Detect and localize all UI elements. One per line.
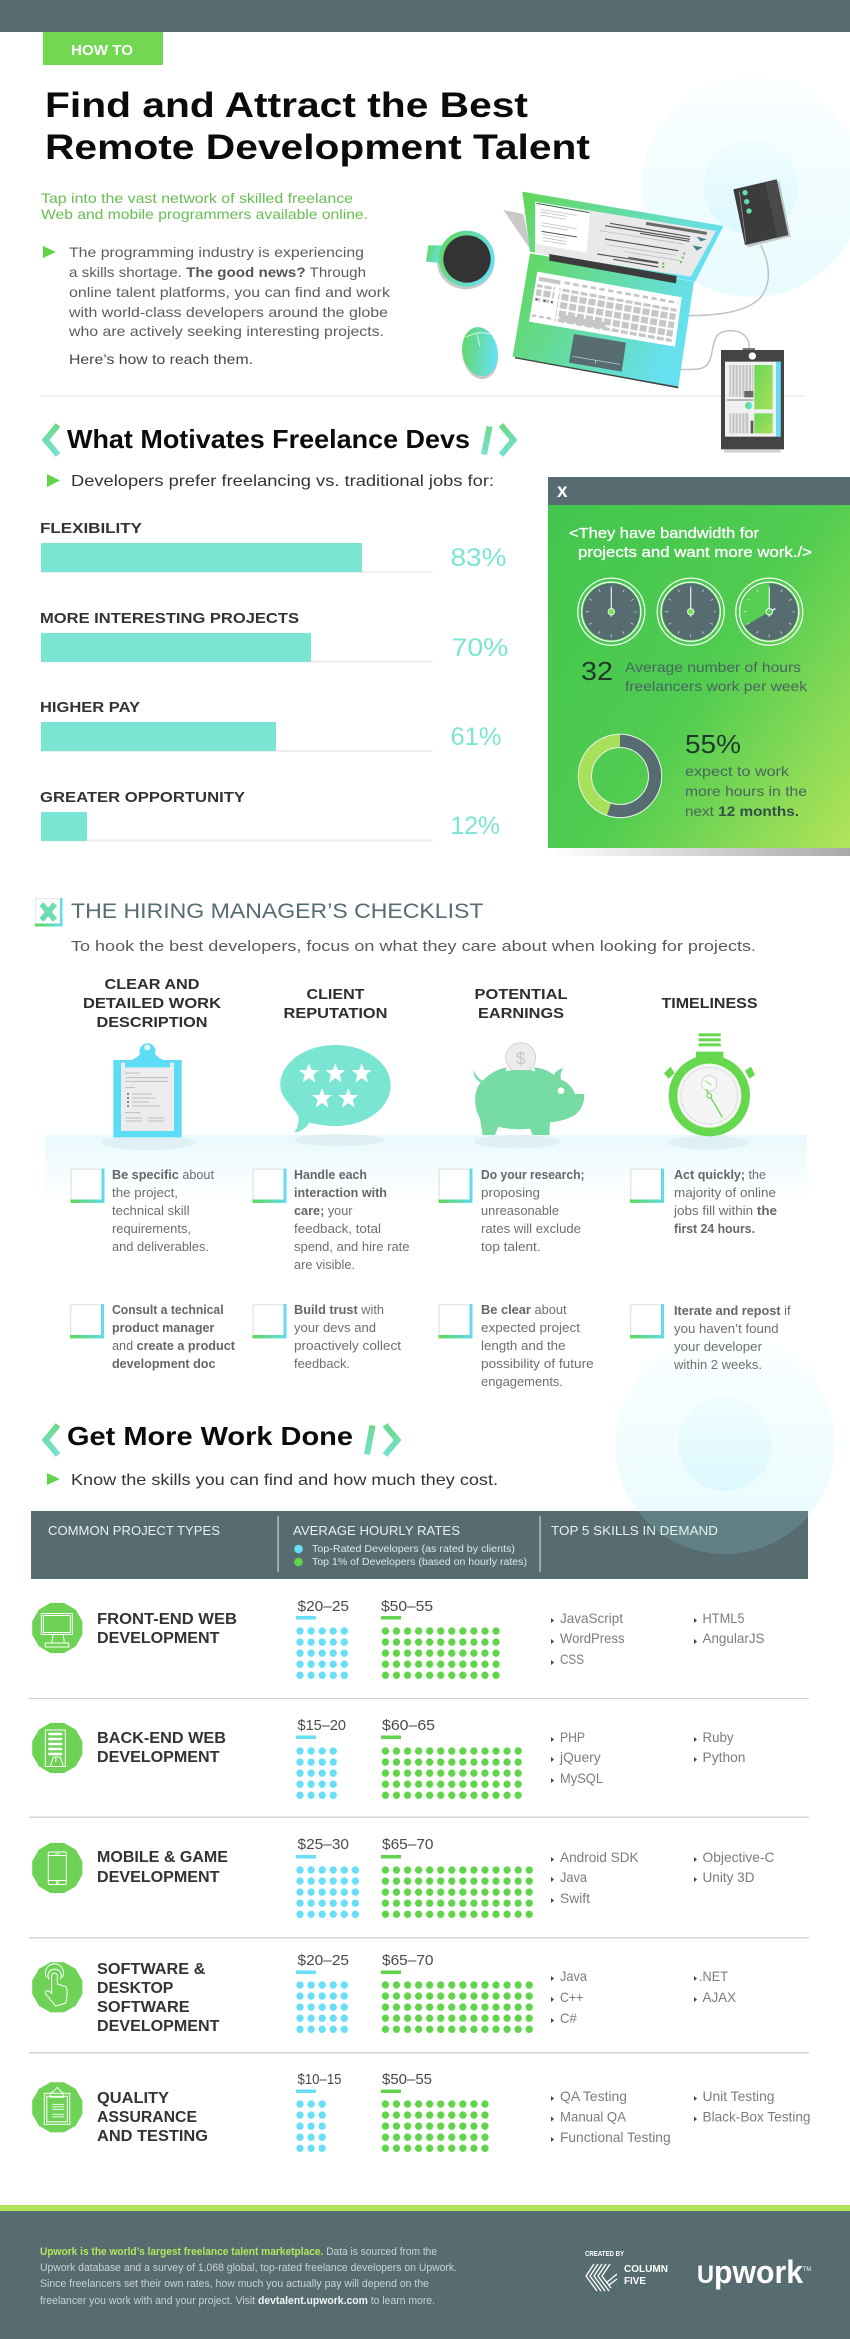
checklist item 5: consult a technical product manager: development doc: [112, 1356, 216, 1371]
skills: CSS: [560, 1651, 584, 1667]
skills: Ruby: [702, 1729, 734, 1745]
stat: 32 hours: 32: [581, 656, 613, 686]
icon: server: [32, 1723, 82, 1773]
logo: upwork: Upwork: [697, 2254, 803, 2290]
checklist item 8: iterate and repost: Iterate and repost if: [674, 1303, 791, 1318]
checklist item 1: be specific: technical skill: [112, 1203, 190, 1218]
row: mobile and game development: DEVELOPMENT: [97, 1869, 220, 1886]
bar: more interesting projects 70%: MORE INTERESTING PROJECTS: [40, 610, 299, 627]
checklist item 2: handle each interaction: feedback, total: [294, 1221, 381, 1236]
icon: touch hand: [32, 1962, 82, 2012]
logo: column five: [585, 2251, 668, 2291]
skills: [551, 1610, 764, 1667]
checklist item 1: be specific: the project,: [112, 1185, 178, 1200]
logo: column five: COLUMN: [624, 2263, 668, 2275]
column headings: DETAILED WORK: [83, 995, 221, 1012]
legend: Top 1% of Developers (based on hourly rates): [312, 1556, 527, 1568]
panel heading: <They have bandwidth for: [569, 526, 759, 542]
skills: Android SDK: [560, 1849, 639, 1865]
decorative circle lower right: [615, 1334, 835, 1554]
table header: AVERAGE HOURLY RATES: [293, 1523, 460, 1538]
row: software and desktop software development: SOFTWARE &: [97, 1961, 205, 1978]
column headings: [83, 976, 758, 1031]
checklist item 7: be clear: [438, 1302, 594, 1389]
footer text: [40, 2246, 457, 2307]
laptop base: [513, 253, 694, 388]
rates: $25–30: [298, 1836, 349, 1853]
bar: greater opportunity 12%: GREATER OPPORTUNITY: [40, 789, 245, 806]
icon: monitor: [32, 1603, 82, 1653]
rates: [294, 1952, 535, 2035]
row: software and desktop software development: [32, 1952, 737, 2035]
footer: [0, 2205, 850, 2339]
icon: piggy bank with coin: [474, 1043, 584, 1148]
checklist item 1: be specific: requirements,: [112, 1221, 191, 1236]
checklist band background: [45, 1135, 807, 1205]
checklist intro: To hook the best developers, focus on what they care about when looking for projects.: [71, 938, 756, 955]
footer text: Upwork is the world’s largest freelance talent marketplace. Data is sourced from the: [40, 2246, 437, 2258]
skills: [551, 2088, 810, 2145]
checklist item 6: build trust: your devs and: [294, 1320, 376, 1335]
skills: PHP: [560, 1729, 585, 1745]
rates: $50–55: [381, 1598, 433, 1615]
router: [733, 179, 791, 247]
heading: what motivates freelance devs: What Motivates Freelance Devs: [67, 424, 470, 454]
rates: $10–15: [298, 2071, 342, 2088]
checklist item 5: consult a technical product manager: and create a product: [112, 1338, 236, 1353]
checklist item 3: do your research: rates will exclude: [481, 1221, 581, 1236]
checklist item 5: consult a technical product manager: product manager: [112, 1320, 214, 1335]
illustration: laptop, mug, mouse, router, phone: [426, 179, 791, 453]
heading: the hiring manager's checklist: [35, 898, 484, 926]
row: front-end web development: [32, 1598, 764, 1681]
panel heading: projects and want more work./>: [578, 545, 812, 561]
cable: router to laptop: [688, 245, 768, 316]
footer text: freelancer you work with and your project. Visit devtalent.upwork.com to learn more.: [40, 2295, 435, 2307]
row: front-end web development: FRONT-END WEB: [97, 1611, 237, 1628]
icon: stopwatch: [664, 1033, 755, 1149]
skills: WordPress: [560, 1630, 624, 1646]
table header: TOP 5 SKILLS IN DEMAND: [551, 1523, 718, 1538]
panel heading: [569, 526, 812, 561]
skills: QA Testing: [560, 2088, 627, 2104]
skills: Unity 3D: [702, 1869, 754, 1885]
row: software and desktop software development: SOFTWARE: [97, 1999, 190, 2016]
intro paragraph: The programming industry is experiencing: [69, 244, 364, 260]
checklist item 8: iterate and repost: you haven’t found: [674, 1321, 779, 1336]
row: software and desktop software development: DESKTOP: [97, 1980, 173, 1997]
checklist item 2: handle each interaction: Handle each: [294, 1167, 367, 1182]
row: quality assurance and testing: AND TESTING: [97, 2128, 208, 2145]
bar chart: reasons for freelancing: [40, 520, 508, 842]
skills: Java: [560, 1869, 587, 1885]
subheading with arrow: Developers prefer freelancing vs. traditional jobs for:: [71, 473, 494, 490]
heading: get more work done: Get More Work Done: [67, 1421, 353, 1451]
green intro text: Tap into the vast network of skilled freelance: [41, 190, 353, 206]
rates: [294, 1717, 524, 1801]
bar: higher pay 61%: [40, 699, 502, 752]
stat: 32 hours: Average number of hours: [625, 659, 801, 675]
skills: AngularJS: [702, 1630, 764, 1646]
phone: [721, 348, 784, 453]
skills: [551, 1968, 737, 2026]
checklist item 4: act quickly: first 24 hours.: [674, 1221, 755, 1236]
legend: [294, 1543, 527, 1568]
icon: clipboard: [32, 2082, 82, 2132]
heading: the hiring manager's checklist: THE HIRING MANAGER’S CHECKLIST: [71, 900, 484, 923]
icon: arrow: [43, 246, 56, 258]
footer text: Upwork database and a survey of 1,068 global, top-rated freelance developers on Upwork.: [40, 2262, 457, 2274]
checklist item 2: handle each interaction: spend, and hire rate: [294, 1239, 410, 1254]
table header: [31, 1511, 808, 1579]
skills: Black-Box Testing: [702, 2108, 810, 2124]
checklist item 1: be specific: Be specific about: [112, 1167, 214, 1182]
row: mobile and game development: MOBILE & GAME: [97, 1849, 228, 1866]
checklist item 6: build trust: proactively collect: [294, 1338, 401, 1353]
skills: Functional Testing: [560, 2129, 671, 2145]
checklist item 6: build trust: [252, 1302, 401, 1371]
checklist item 7: be clear: length and the: [481, 1338, 566, 1353]
intro paragraph: Here’s how to reach them.: [69, 351, 253, 367]
skills: Objective-C: [702, 1849, 774, 1865]
row: software and desktop software development: DEVELOPMENT: [97, 2018, 220, 2035]
how to tag: [43, 32, 163, 65]
logo: upwork: TM: [803, 2267, 811, 2273]
checklist item 3: do your research: proposing: [481, 1185, 540, 1200]
checklist item 2: handle each interaction: are visible.: [294, 1257, 355, 1272]
stat: 32 hours: [581, 656, 808, 694]
skills: AJAX: [702, 1989, 737, 2005]
checklist item 2: handle each interaction: care; your: [294, 1203, 353, 1218]
clock icons: [578, 578, 803, 645]
title: [45, 85, 590, 167]
skills: Java: [560, 1968, 587, 1984]
rates: $60–65: [382, 1717, 435, 1734]
bar: higher pay 61%: 61%: [450, 723, 502, 751]
checklist item 7: be clear: expected project: [481, 1320, 580, 1335]
footer text: Since freelancers set their own rates, how much you actually pay will depend on the: [40, 2278, 429, 2290]
checklist item 7: be clear: engagements.: [481, 1374, 563, 1389]
stat: 55% expect to work more: [685, 729, 807, 819]
logo: column five: FIVE: [624, 2275, 646, 2287]
bar: greater opportunity 12%: 12%: [450, 812, 500, 840]
heading: get more work done: [46, 1421, 398, 1455]
title: Find and Attract the Best: [45, 85, 528, 125]
skills: HTML5: [702, 1610, 745, 1626]
rates: [294, 1598, 502, 1681]
column headings: CLEAR AND: [104, 976, 200, 993]
column headings: CLIENT: [306, 986, 364, 1003]
checklist item 8: iterate and repost: [630, 1303, 791, 1372]
stat: 55% expect to work more: expect to work: [685, 763, 790, 779]
skills: Unit Testing: [702, 2088, 774, 2104]
rates: $20–25: [298, 1952, 349, 1969]
checklist item 4: act quickly: [630, 1167, 777, 1236]
checklist item 5: consult a technical product manager: [70, 1302, 236, 1371]
icon: phone: [32, 1843, 82, 1893]
checklist item 3: do your research: Do your research;: [481, 1167, 584, 1182]
checklist item 4: act quickly: Act quickly; the: [674, 1167, 766, 1182]
checklist item 5: consult a technical product manager: Consult a technical: [112, 1302, 224, 1317]
skills: Swift: [560, 1890, 590, 1906]
how to tag: HOW TO: [71, 43, 133, 59]
checklist item 7: be clear: possibility of future: [481, 1356, 594, 1371]
rates: $20–25: [298, 1598, 349, 1615]
rates: $15–20: [298, 1717, 346, 1734]
panel: bandwidth stats: [548, 477, 850, 856]
mug: [426, 231, 495, 289]
column headings: REPUTATION: [284, 1005, 388, 1022]
donut chart: 55%: [578, 734, 662, 818]
green intro text: Web and mobile programmers available online.: [41, 206, 368, 222]
stat: 55% expect to work more: next 12 months.: [685, 803, 799, 819]
row: quality assurance and testing: ASSURANCE: [97, 2109, 197, 2126]
bar: more interesting projects 70%: 70%: [452, 634, 508, 662]
row: back-end web development: [32, 1717, 745, 1801]
skills: MySQL: [560, 1770, 603, 1786]
bar: flexibility 83%: [40, 520, 506, 573]
bar: higher pay 61%: HIGHER PAY: [40, 699, 140, 716]
checklist item 2: handle each interaction: [252, 1167, 410, 1272]
row: quality assurance and testing: QUALITY: [97, 2090, 170, 2107]
icon: piggy bank with coin: $: [516, 1048, 526, 1068]
column headings: TIMELINESS: [662, 995, 758, 1012]
skills: C#: [560, 2010, 577, 2026]
bar: flexibility 83%: FLEXIBILITY: [40, 520, 142, 537]
mouse: [458, 324, 502, 382]
rates: [294, 2071, 490, 2154]
title: Remote Development Talent: [45, 127, 590, 167]
intro paragraph: with world-class developers around the globe: [68, 304, 388, 320]
logo: column five: CREATED BY: [585, 2251, 624, 2258]
intro paragraph: who are actively seeking interesting projects.: [68, 323, 384, 339]
stat: 32 hours: freelancers work per week: [625, 678, 808, 694]
checklist item 3: do your research: top talent.: [481, 1239, 541, 1254]
skills: jQuery: [559, 1749, 601, 1765]
row: quality assurance and testing: [32, 2071, 810, 2154]
bar: greater opportunity 12%: [40, 789, 500, 842]
row: mobile and game development: [32, 1836, 774, 1920]
green intro text: [41, 190, 368, 222]
skills: Manual QA: [560, 2108, 627, 2124]
checklist item 4: act quickly: jobs fill within the: [673, 1203, 777, 1218]
cable: phone to laptop: [679, 331, 749, 370]
skills: [551, 1849, 774, 1906]
checklist item 3: do your research: [438, 1167, 584, 1254]
rates: $50–55: [382, 2071, 432, 2088]
decorative circle top right: [642, 77, 850, 297]
skills: .NET: [699, 1968, 728, 1984]
bar: more interesting projects 70%: [40, 610, 508, 662]
top bar: [0, 0, 850, 32]
stat: 55% expect to work more: 55%: [685, 729, 741, 759]
bar: flexibility 83%: 83%: [450, 544, 506, 572]
skills: JavaScript: [560, 1610, 623, 1626]
skills: Python: [702, 1749, 746, 1765]
rates: $65–70: [382, 1836, 434, 1853]
stat: 55% expect to work more: more hours in the: [685, 783, 807, 799]
rates: $65–70: [382, 1952, 434, 1969]
checklist item 1: be specific: and deliverables.: [112, 1239, 209, 1254]
intro paragraph: online talent platforms, you can find and work: [69, 284, 391, 300]
icon: close x: x: [557, 481, 568, 502]
checklist item 2: handle each interaction: interaction with: [294, 1185, 387, 1200]
column headings: POTENTIAL: [474, 986, 568, 1003]
skills: [551, 1729, 746, 1786]
icon: clipboard: [102, 1043, 195, 1150]
checklist item 8: iterate and repost: your developer: [674, 1339, 763, 1354]
row: back-end web development: DEVELOPMENT: [97, 1749, 220, 1766]
subheading with arrow: Know the skills you can find and how much they cost.: [71, 1472, 498, 1489]
checklist item 1: be specific: [70, 1167, 214, 1254]
icon: speech bubble with stars: [280, 1045, 391, 1146]
column headings: DESCRIPTION: [96, 1014, 208, 1031]
checklist item 6: build trust: feedback.: [294, 1356, 350, 1371]
checklist item 3: do your research: unreasonable: [481, 1203, 559, 1218]
intro paragraph: [68, 244, 391, 367]
laptop lid: [503, 192, 723, 282]
checklist item 8: iterate and repost: within 2 weeks.: [673, 1357, 762, 1372]
column headings: EARNINGS: [478, 1005, 564, 1022]
checklist item 7: be clear: Be clear about: [481, 1302, 567, 1317]
checklist item 4: act quickly: majority of online: [674, 1185, 776, 1200]
row: back-end web development: BACK-END WEB: [97, 1730, 226, 1747]
table header: COMMON PROJECT TYPES: [48, 1523, 220, 1538]
legend: Top-Rated Developers (as rated by clients): [312, 1543, 515, 1555]
rates: [294, 1836, 535, 1920]
intro paragraph: a skills shortage. The good news? Through: [69, 264, 366, 280]
row: front-end web development: DEVELOPMENT: [97, 1630, 220, 1647]
checklist item 6: build trust: Build trust with: [294, 1302, 384, 1317]
skills: C++: [560, 1989, 583, 2005]
